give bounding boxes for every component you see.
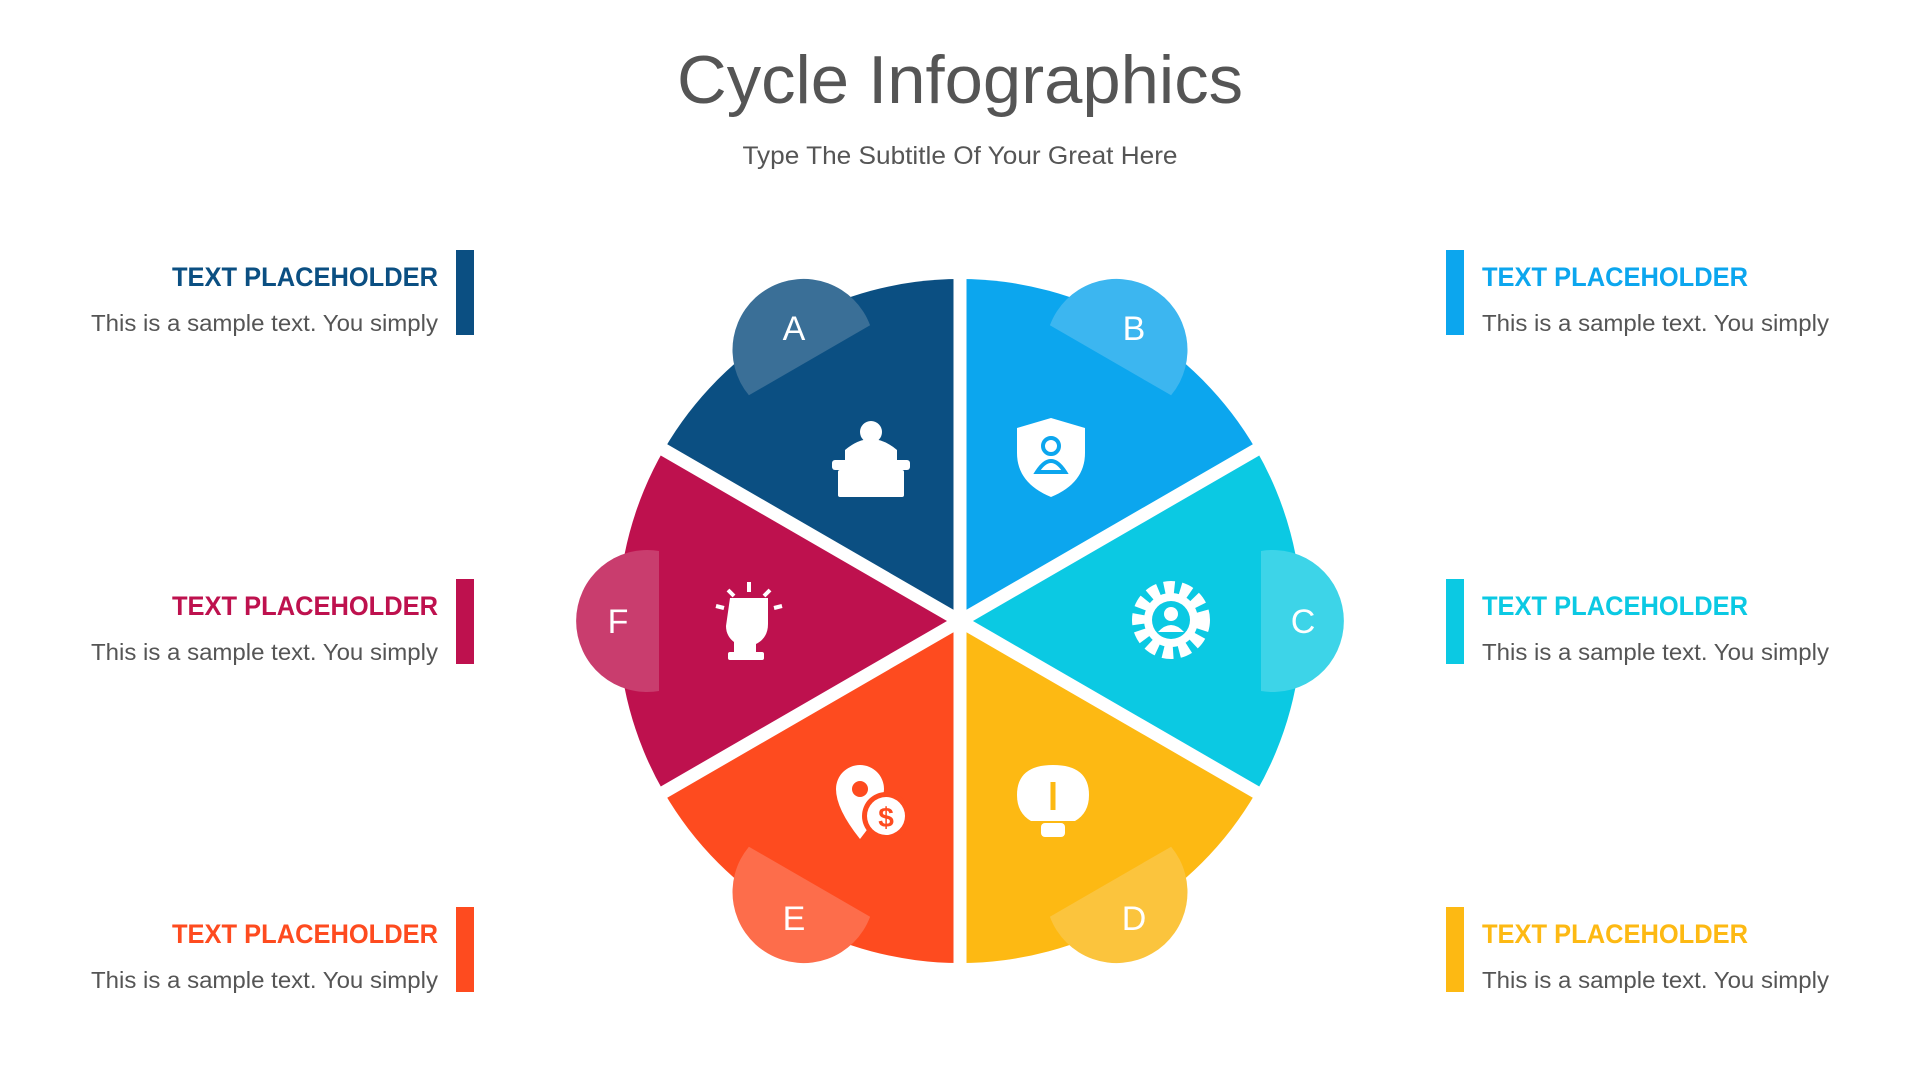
panel: right D <box>1446 907 1830 993</box>
badge A <box>733 279 870 395</box>
panel: right B <box>1446 250 1830 336</box>
badge F <box>576 550 659 692</box>
panel: right D: This is a sample text. You simply <box>1482 967 1830 993</box>
badge B <box>1050 279 1187 395</box>
subtitle: Type The Subtitle Of Your Great Here <box>742 142 1178 170</box>
panel: left F <box>91 579 474 665</box>
badge A: A <box>783 310 806 348</box>
panel: left E: This is a sample text. You simply <box>91 967 439 993</box>
icon: location dollar <box>836 765 910 840</box>
wedge A <box>664 279 960 621</box>
badge C: C <box>1291 603 1315 641</box>
wedge B <box>960 279 1256 621</box>
panel: right B: TEXT PLACEHOLDER <box>1482 262 1748 292</box>
cycle diagram <box>576 260 1344 985</box>
panel: right C: This is a sample text. You simply <box>1482 639 1830 665</box>
wedge D <box>960 621 1256 963</box>
badge E: E <box>783 900 805 938</box>
panel: left A: TEXT PLACEHOLDER <box>172 262 438 292</box>
icon: brain bulb <box>1017 765 1089 837</box>
icon: raised fist <box>716 582 782 660</box>
wedge F <box>618 450 960 792</box>
wedge C <box>960 450 1302 792</box>
panel: right B: This is a sample text. You simply <box>1482 310 1830 336</box>
icon: podium speaker <box>832 421 910 497</box>
panel: left E <box>91 907 474 993</box>
badge B: B <box>1123 310 1145 348</box>
panel: left A <box>91 250 474 336</box>
icon: location dollar: $ <box>878 802 894 833</box>
panel: right C: TEXT PLACEHOLDER <box>1482 591 1748 621</box>
panel: left E: TEXT PLACEHOLDER <box>172 919 438 949</box>
panel: left F: This is a sample text. You simply <box>91 639 439 665</box>
title: Cycle Infographics <box>677 42 1243 118</box>
badge E <box>733 847 870 963</box>
badge D: D <box>1122 900 1146 938</box>
panel: right C <box>1446 579 1830 665</box>
icon: shield user <box>1017 418 1085 497</box>
badge F: F <box>608 603 628 641</box>
panel: left F: TEXT PLACEHOLDER <box>172 591 438 621</box>
wedge E <box>664 621 960 963</box>
badge D <box>1050 847 1187 963</box>
panel: right D: TEXT PLACEHOLDER <box>1482 919 1748 949</box>
badge C <box>1261 550 1344 692</box>
panel: left A: This is a sample text. You simply <box>91 310 439 336</box>
icon: gear user <box>1139 588 1203 652</box>
